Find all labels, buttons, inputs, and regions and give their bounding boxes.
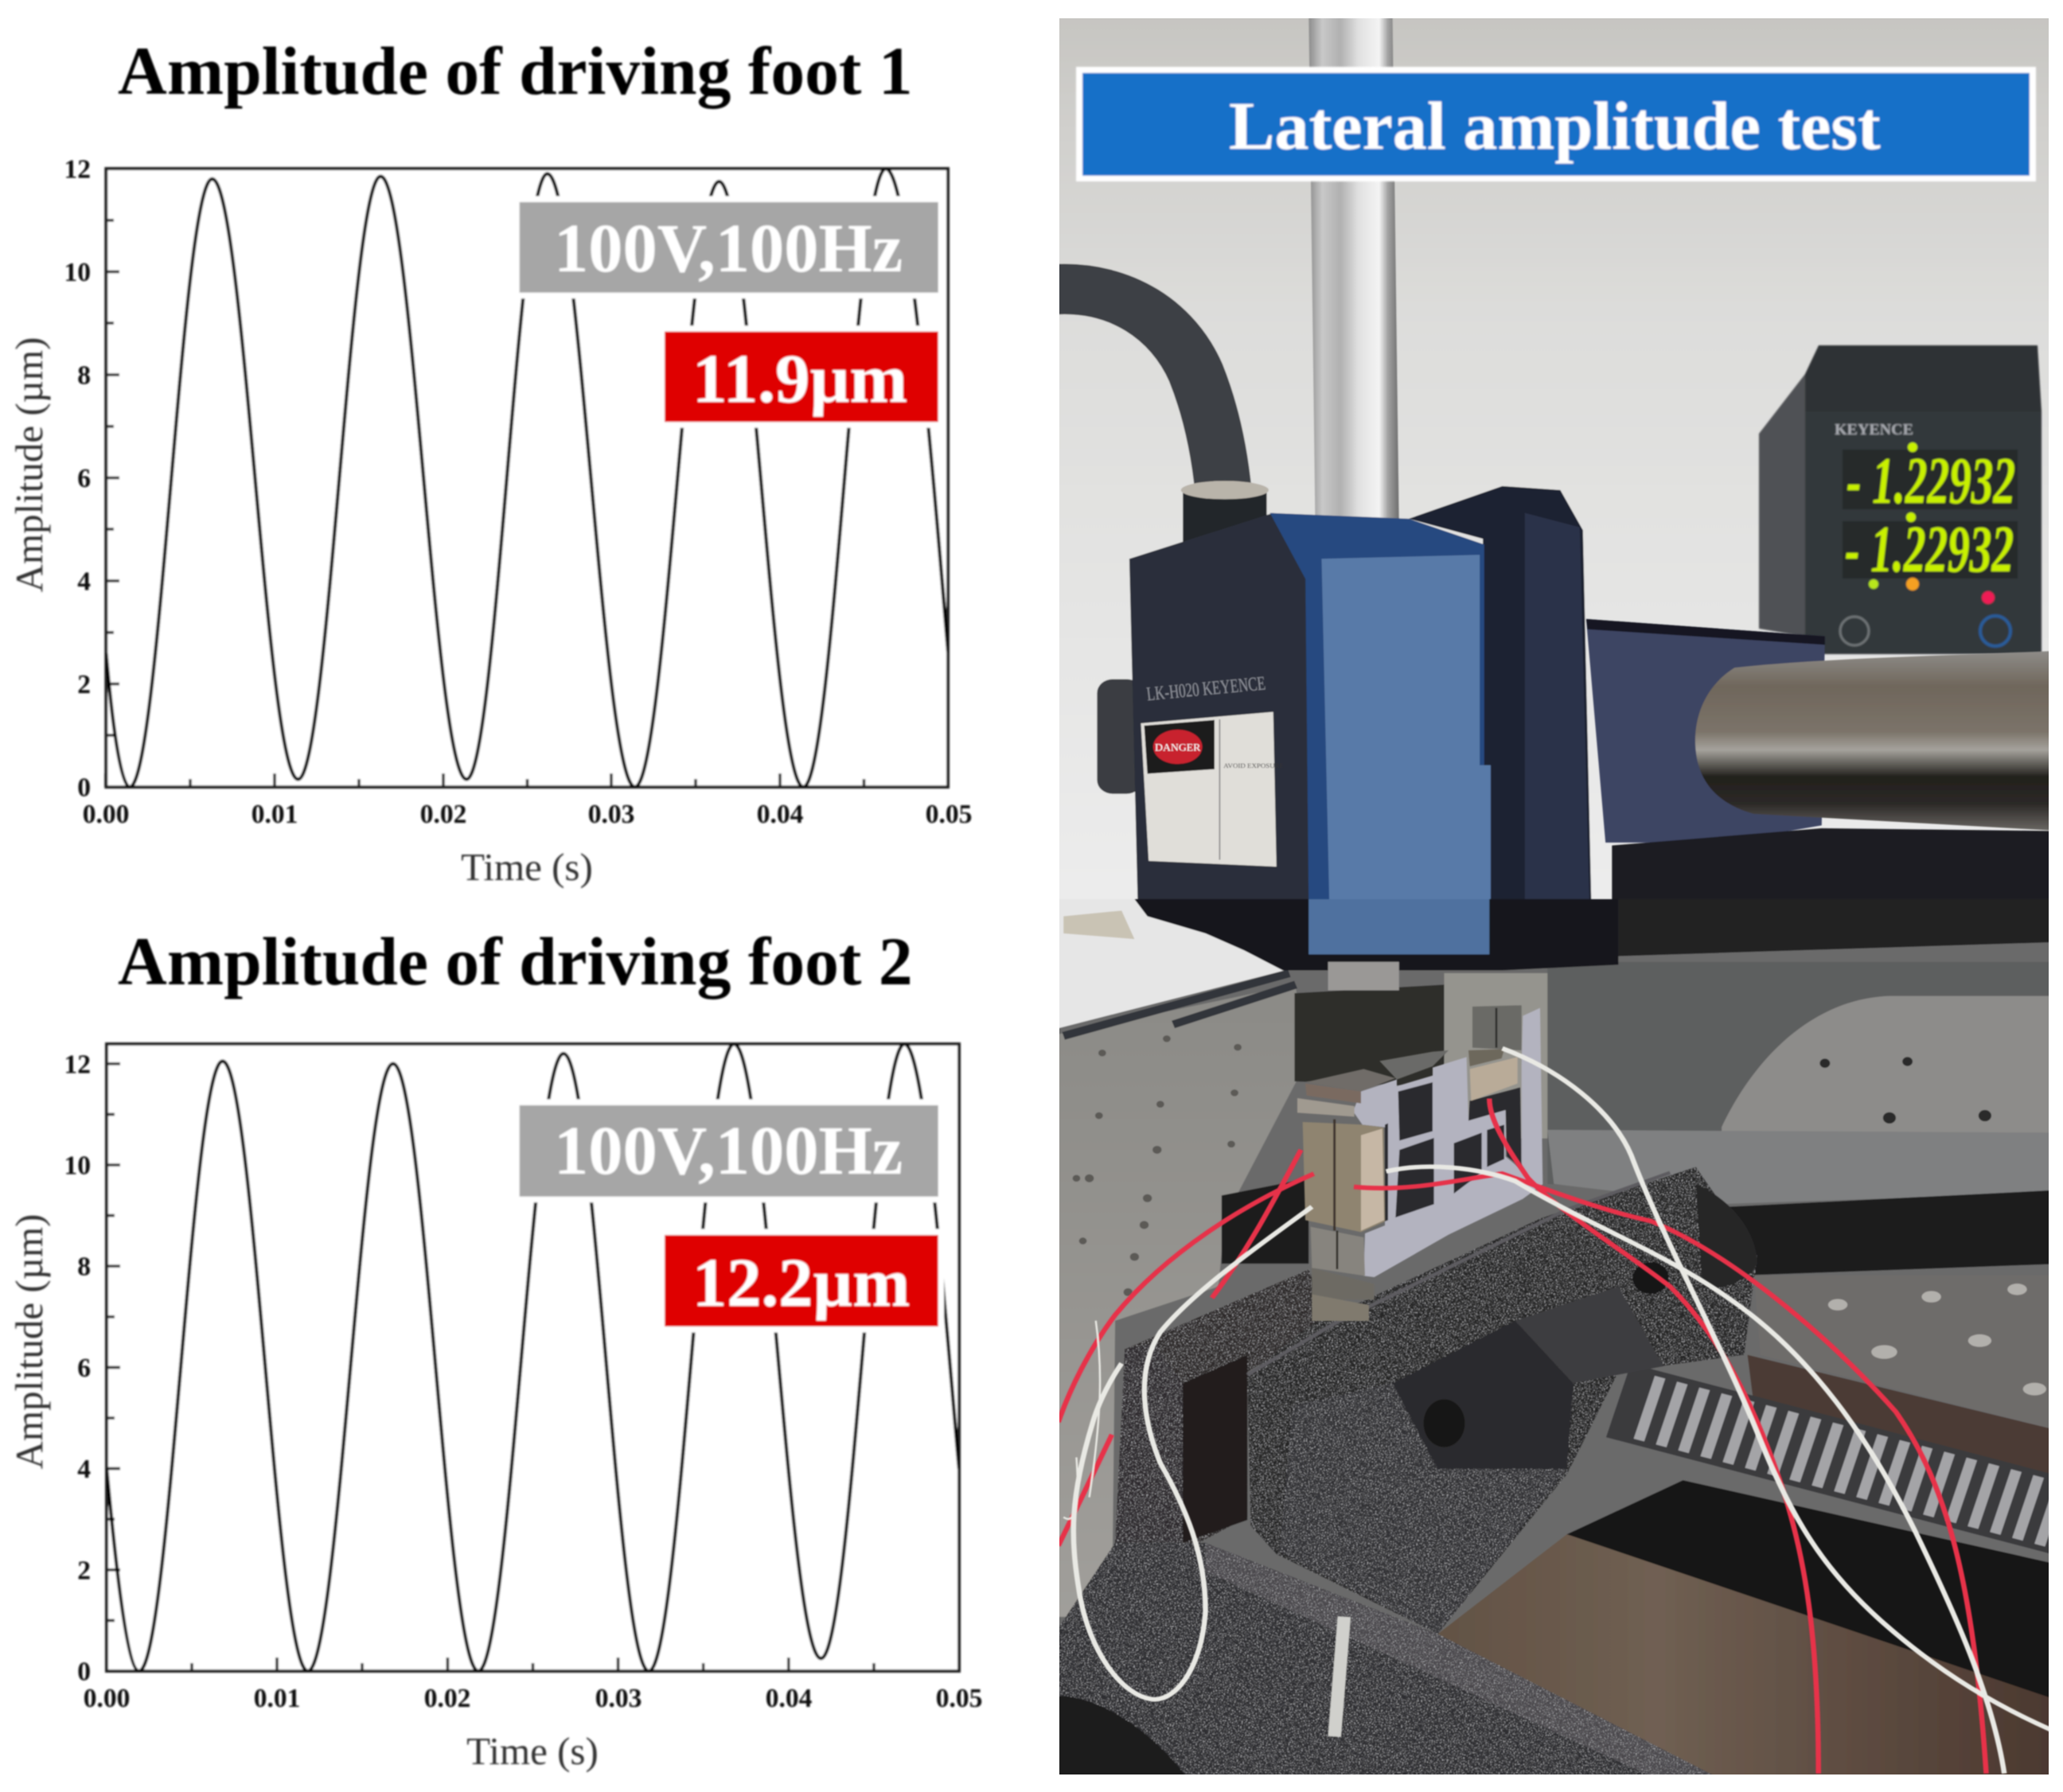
badge: measured amplitude: 12.2µm — [692, 1245, 910, 1321]
x axis tick labels: 0.00 — [83, 800, 129, 829]
horizontal steel rod — [1695, 651, 2063, 831]
x axis tick labels: 0.03 — [595, 1684, 642, 1713]
x axis tick labels — [84, 1684, 982, 1713]
axis ticks — [106, 220, 948, 787]
sensor left face — [1129, 513, 1315, 902]
y axis tick labels: 10 — [64, 1151, 91, 1181]
sensor underside — [1134, 899, 1618, 970]
badge: measured amplitude — [665, 1235, 938, 1326]
x axis tick labels: 0.01 — [254, 1684, 300, 1713]
y axis tick labels: 6 — [77, 1354, 91, 1383]
y axis tick labels: 12 — [64, 1050, 91, 1079]
danger label: AVOID EXPOSURE — [1223, 762, 1284, 769]
side bracket — [1586, 619, 1825, 843]
danger label: DANGER — [1155, 742, 1201, 753]
x axis tick labels: 0.00 — [84, 1684, 130, 1713]
sensor cable — [1054, 289, 1223, 493]
amplitude curve — [106, 169, 948, 787]
badge: drive conditions: 100V,100Hz — [554, 210, 903, 286]
optical table left — [1051, 984, 1302, 1617]
x axis label: Time (s) — [466, 1729, 599, 1773]
photo upper part: bracket and horizontal rod — [1586, 619, 2063, 902]
stator windows — [1385, 1082, 1522, 1221]
brown rail behind screw — [1748, 1355, 2063, 1491]
indicator lights — [1869, 442, 1995, 604]
axis ticks — [107, 1064, 959, 1671]
lower blocks — [1311, 1227, 1375, 1321]
white wires — [1063, 1049, 2063, 1774]
lead screw — [1618, 1400, 2063, 1517]
chart panel: driving foot 1 — [7, 33, 972, 889]
x axis tick labels: 0.02 — [424, 1684, 470, 1713]
end plates — [1297, 1084, 1361, 1116]
top surfaces — [1305, 1050, 1449, 1092]
plot frame — [107, 1044, 959, 1671]
sensor model text: LK-H020 KEYENCE — [1145, 672, 1266, 705]
x axis tick labels: 0.02 — [420, 800, 466, 829]
photo lower part: table and vise — [1051, 899, 2063, 1792]
x axis tick labels: 0.04 — [766, 1684, 813, 1713]
piezo stator assembly — [1297, 1005, 1542, 1321]
y axis tick labels: 2 — [77, 670, 91, 699]
wires — [1059, 1049, 2063, 1774]
chart panel: driving foot 2 — [7, 924, 982, 1773]
dark post — [1294, 984, 1445, 1087]
black tubes on table — [1063, 973, 1296, 1036]
white paint mark — [1335, 1617, 1344, 1736]
plot frame — [106, 169, 948, 787]
badge: drive conditions — [520, 1105, 938, 1197]
badge: drive conditions: 100V,100Hz — [554, 1112, 903, 1189]
front buttons — [1840, 616, 2010, 646]
x axis label: Time (s) — [461, 845, 593, 889]
vise fixed jaw — [1115, 1269, 1332, 1543]
banner title: lateral amplitude test: Lateral amplitude test — [1229, 88, 1881, 164]
brand text: KEYENCE — [1835, 421, 1913, 438]
photo upper part: wall, rod, sensor — [1051, 18, 2063, 902]
left piezo stack — [1303, 1120, 1385, 1232]
y axis tick labels — [64, 154, 91, 802]
rear block — [1472, 1005, 1522, 1050]
y axis tick labels: 0 — [77, 773, 91, 802]
digit screens — [1843, 450, 2018, 579]
vise base — [1051, 1543, 1748, 1779]
x axis tick labels — [83, 800, 972, 829]
sensor light panel — [1321, 555, 1491, 902]
mounting bracket — [1409, 486, 1591, 902]
y axis label: Amplitude (µm) — [7, 1214, 51, 1469]
sensor side knob — [1097, 680, 1142, 794]
y axis tick labels — [64, 1050, 91, 1687]
badge: measured amplitude — [665, 332, 938, 422]
table hole dots — [1073, 1035, 1242, 1296]
background stage — [1547, 962, 2063, 1195]
display controller — [1759, 345, 2042, 654]
red wires — [1059, 1099, 1987, 1774]
y axis tick labels: 8 — [77, 1252, 91, 1282]
badge: measured amplitude: 11.9µm — [692, 340, 907, 417]
vertical steel rod — [1308, 18, 1399, 519]
y axis tick labels: 2 — [77, 1556, 91, 1585]
right piezo — [1468, 1008, 1518, 1101]
sensor blue face — [1270, 513, 1484, 902]
x axis tick labels: 0.05 — [936, 1684, 982, 1713]
title banner — [1076, 67, 2036, 181]
photo panel: lateral amplitude test rig — [1051, 18, 2063, 1792]
x axis tick labels: 0.01 — [252, 800, 298, 829]
y axis tick labels: 0 — [77, 1657, 91, 1687]
dark space under screw — [1567, 1480, 2063, 1702]
danger label — [1141, 712, 1284, 867]
y axis tick labels: 8 — [77, 361, 91, 390]
y axis tick labels: 10 — [64, 258, 91, 287]
title: driving foot 2: Amplitude of driving foot 2 — [118, 924, 913, 999]
dark base below rod — [1612, 828, 2063, 902]
vise moving jaw — [1247, 1167, 1757, 1634]
y axis tick labels: 6 — [77, 464, 91, 493]
x axis tick labels: 0.03 — [588, 800, 634, 829]
aluminium stator body — [1353, 1008, 1542, 1277]
wall and floor at left — [1051, 899, 1296, 1030]
title: driving foot 1: Amplitude of driving foot 1 — [118, 33, 913, 109]
amplitude curve — [107, 1044, 959, 1671]
y axis label: Amplitude (µm) — [7, 337, 51, 592]
x axis tick labels: 0.05 — [926, 800, 972, 829]
brown guide rail — [1437, 1534, 2063, 1788]
y axis tick labels: 4 — [77, 1455, 91, 1484]
x axis tick labels: 0.04 — [757, 800, 804, 829]
y axis tick labels: 4 — [77, 567, 91, 597]
y axis tick labels: 12 — [64, 154, 91, 185]
